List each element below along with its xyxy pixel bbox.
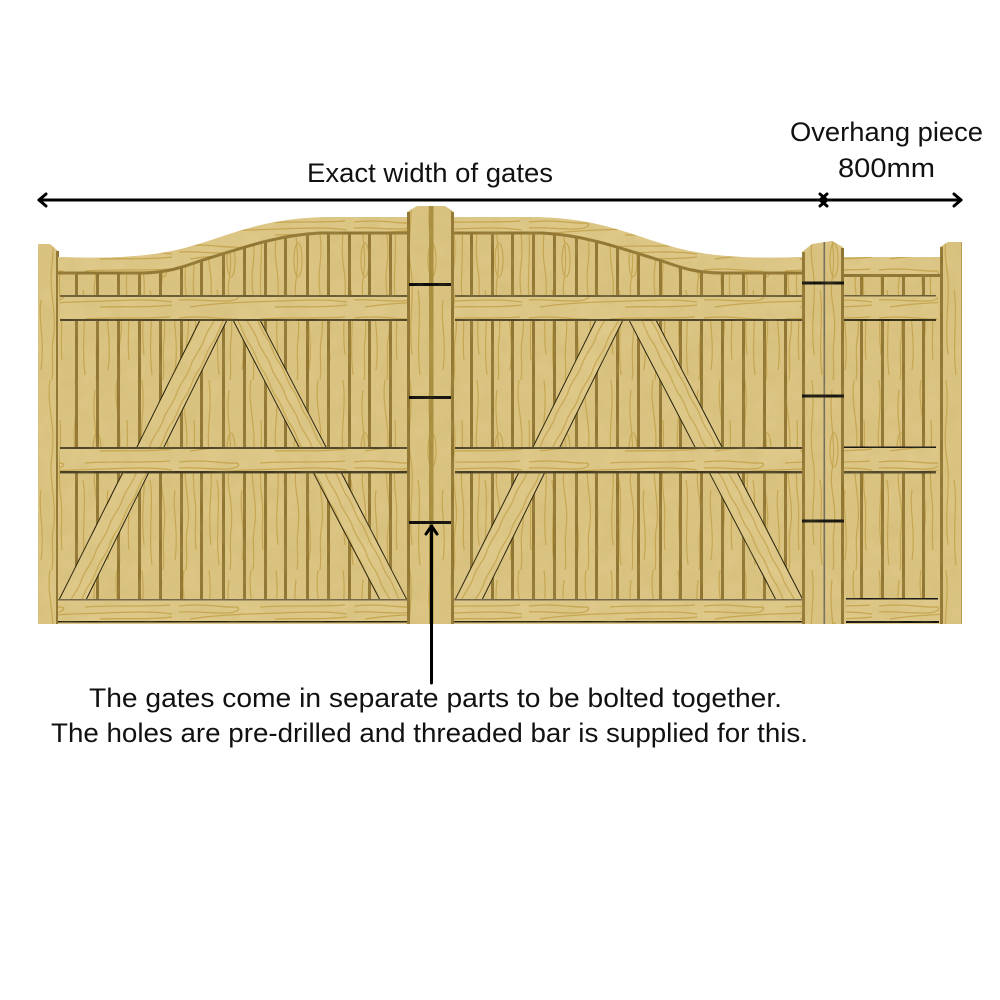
- left gate bottom rail: [58, 599, 408, 624]
- overhang piece: [844, 257, 941, 624]
- left gate vertical boards: [58, 217, 408, 624]
- right gate curved top rail: [454, 217, 804, 273]
- arrow: exact width of gates: [39, 194, 827, 206]
- right end post: [940, 242, 962, 624]
- overhang top rail: [844, 295, 938, 321]
- caption: assembly note: [51, 683, 808, 748]
- overhang bottom rail: [846, 598, 941, 624]
- bolt marks on centre post: [409, 283, 451, 524]
- label: exact width of gates: Exact width of gates: [307, 158, 553, 188]
- overhang vertical boards: [844, 262, 941, 624]
- wood tone mottling: [38, 206, 962, 624]
- label: overhang piece 800mm: Overhang piece: [790, 117, 983, 147]
- left hanging post: [38, 244, 59, 624]
- right gate middle rail: [455, 447, 803, 473]
- right gate top rail: [455, 295, 803, 321]
- right gate vertical boards: [454, 217, 804, 624]
- label: overhang piece 800mm: [790, 117, 983, 183]
- left gate top rail: [60, 295, 408, 321]
- centre post: [407, 206, 454, 624]
- fence: complete gate assembly: [38, 206, 962, 624]
- left gate curved top rail: [58, 217, 408, 273]
- left gate middle rail: [60, 447, 408, 473]
- joining post with centre seam: [802, 241, 844, 624]
- overhang top band: [844, 257, 941, 277]
- right gate bottom rail: [454, 599, 804, 624]
- arrow: overhang piece width: [820, 194, 961, 206]
- caption: assembly note: The holes are pre-drilled and threaded bar is supplied for this.: [51, 718, 808, 748]
- overhang middle rail: [844, 446, 938, 474]
- left gate diagonal braces: [59, 320, 407, 600]
- caption: assembly note: The gates come in separate parts to be bolted together.: [89, 683, 782, 713]
- bolt marks on joining post: [802, 282, 844, 522]
- right gate leaf: [454, 217, 804, 624]
- left gate leaf: [58, 217, 408, 624]
- arrow: pointer to bolt hole: [426, 526, 437, 683]
- label: overhang piece 800mm: 800mm: [838, 153, 935, 183]
- right gate diagonal braces: [455, 320, 803, 600]
